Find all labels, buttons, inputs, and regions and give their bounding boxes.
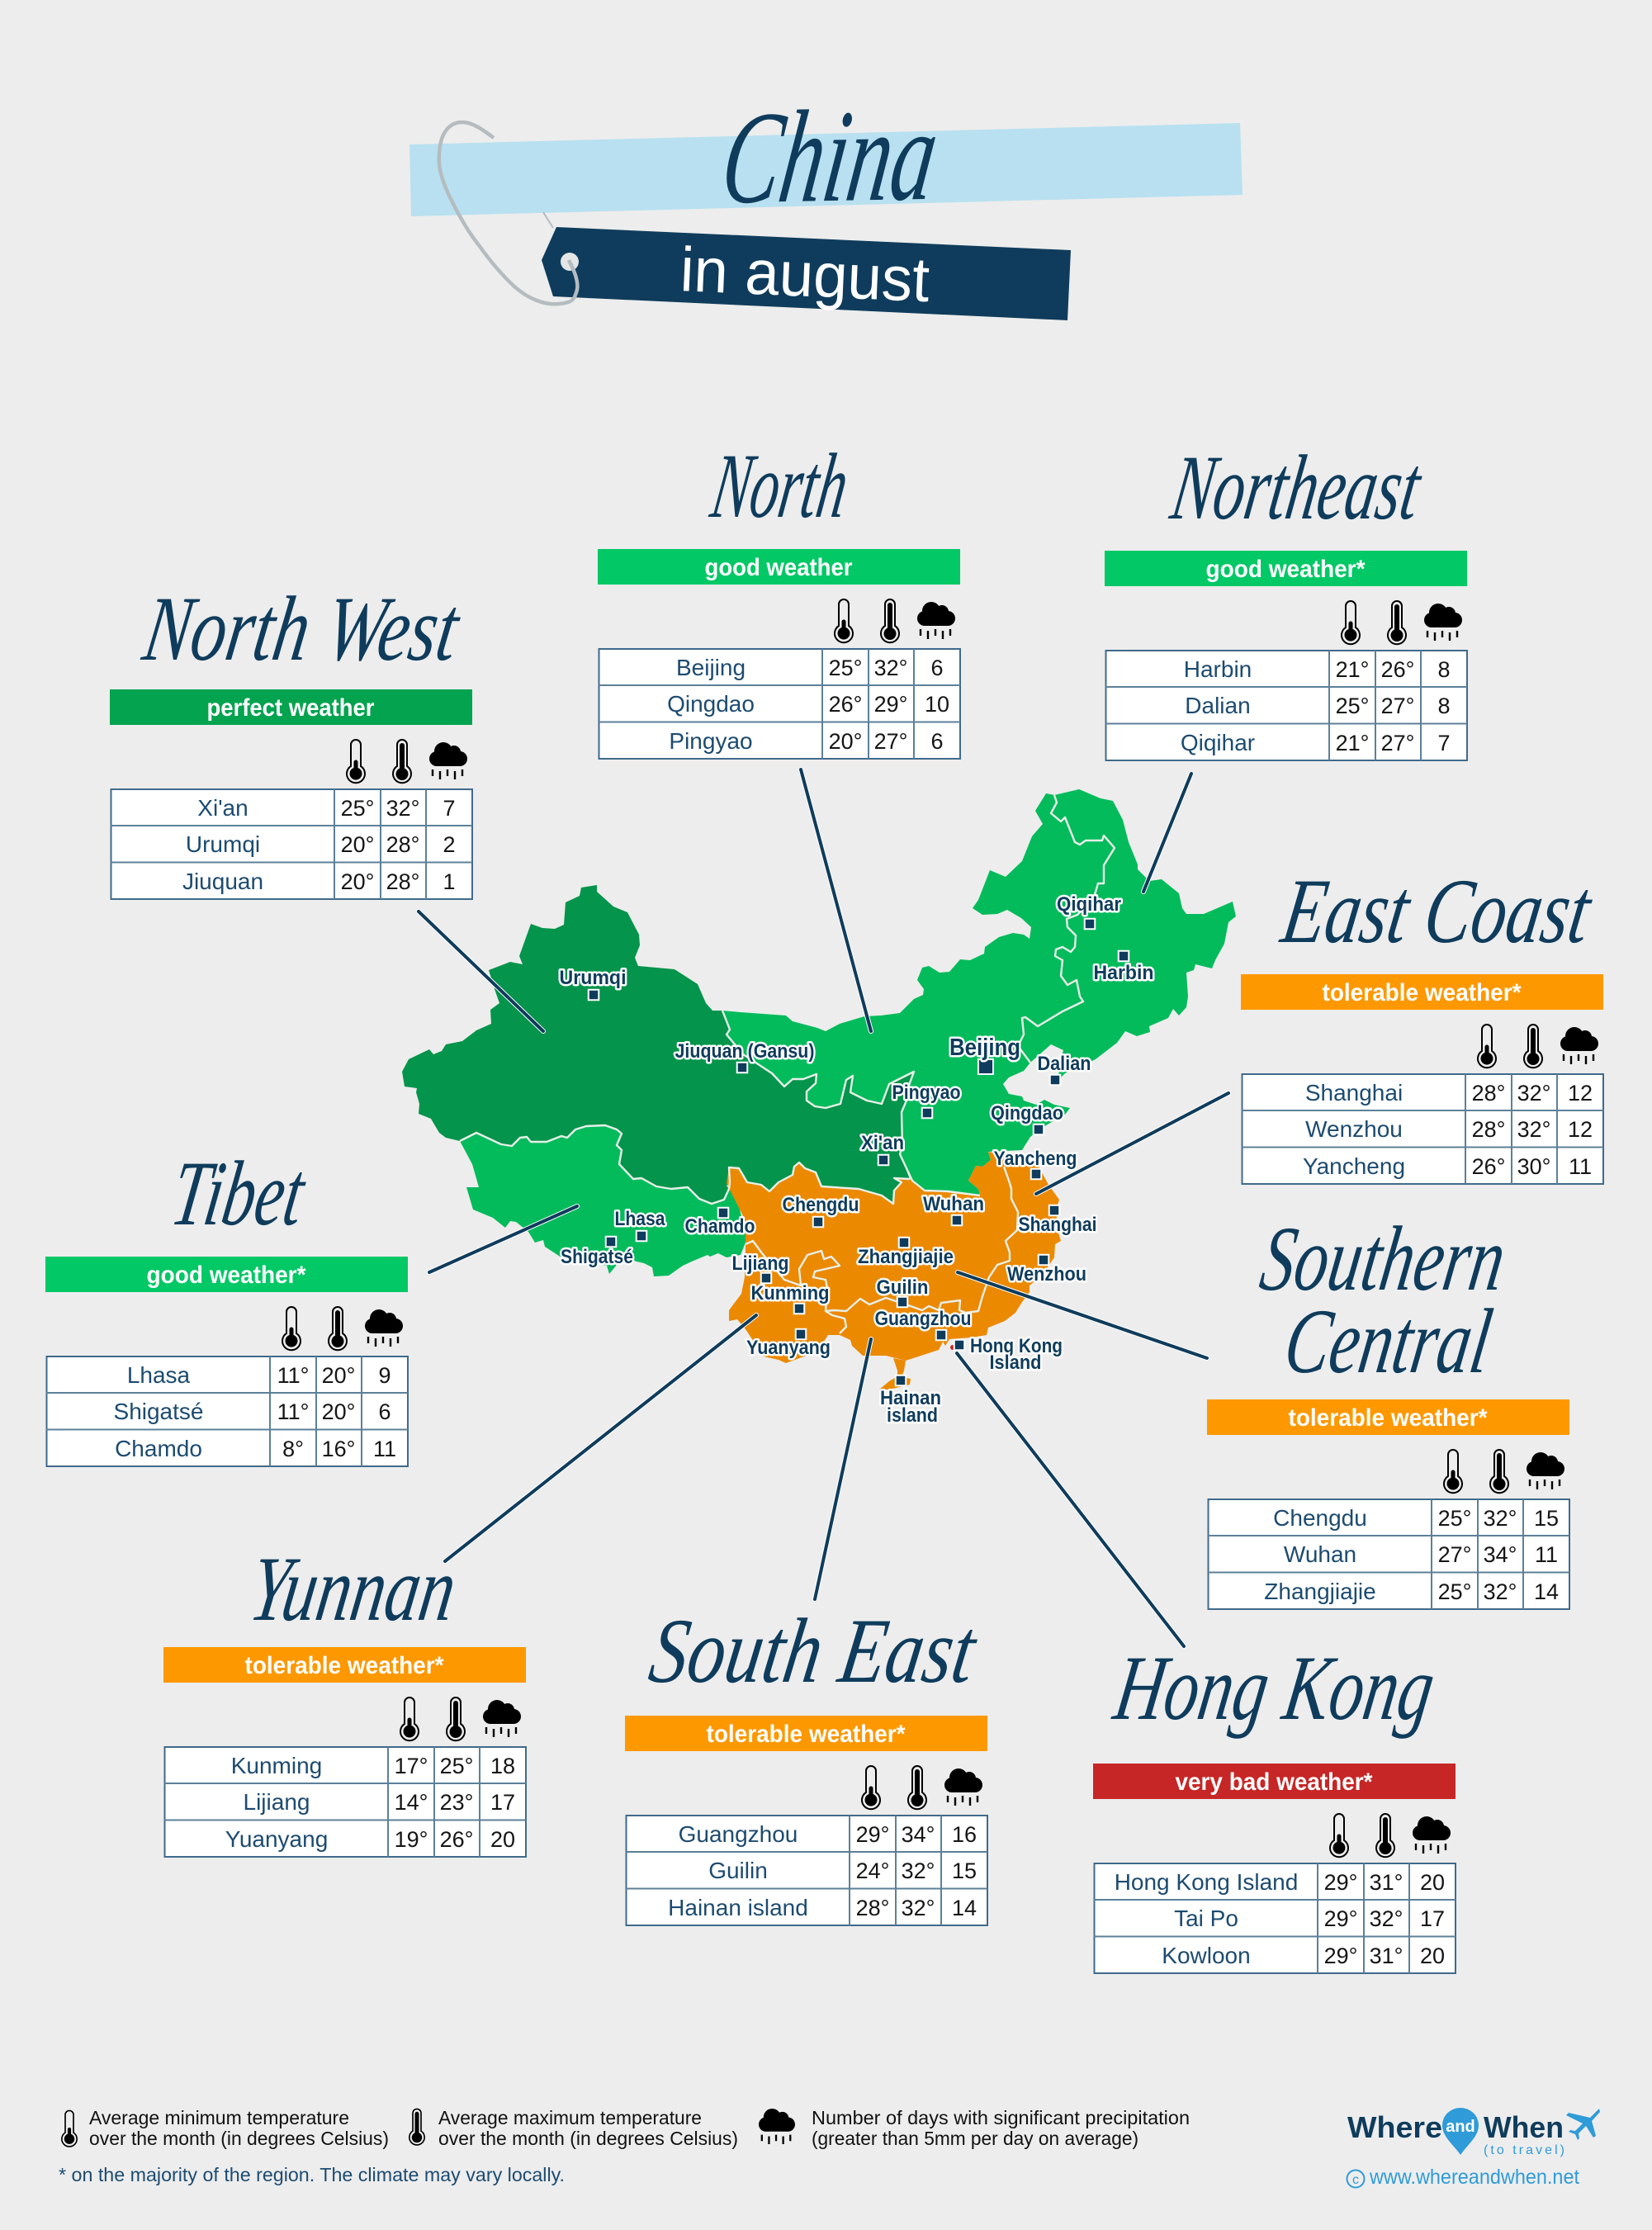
icon: map pin (1442, 2108, 1479, 2155)
climate table: 32° (1484, 1579, 1517, 1604)
region: south (727, 1152, 1061, 1363)
climate table: 12 (1568, 1117, 1593, 1142)
map city labels: Kunming (751, 1282, 829, 1304)
climate table: 8° (282, 1437, 304, 1461)
title ribbon (409, 123, 1243, 216)
climate table: 12 (1568, 1081, 1593, 1106)
climate table: 28° (1472, 1081, 1505, 1106)
column icons (347, 740, 467, 783)
climate table: 6 (930, 729, 944, 754)
legend: minimum temperature: over the month (in degrees Celsius) (89, 2128, 389, 2149)
heading China: China (714, 81, 946, 231)
climate table: 7 (1437, 731, 1451, 755)
climate table: 2 (443, 832, 456, 857)
map city labels: Yuanyang (746, 1337, 831, 1359)
climate table (1242, 1074, 1603, 1184)
column icons (1444, 1450, 1564, 1493)
region: north west (402, 885, 914, 1204)
climate table: Qingdao (667, 691, 755, 717)
panel: northeast (1105, 438, 1467, 760)
climate table: Urumqi (186, 831, 260, 857)
climate table: Hainan island (668, 1895, 808, 1920)
weather banner: good weather (705, 554, 853, 581)
weather banner (110, 689, 472, 725)
weather banner: perfect weather (206, 694, 375, 722)
climate table: 32° (1370, 1906, 1403, 1931)
map city labels: Jiuquan (Gansu) (675, 1040, 814, 1063)
climate table: 32° (386, 796, 419, 821)
copyright url: www.whereandwhen.net (1369, 2166, 1579, 2189)
leader line: tibet (429, 1206, 577, 1272)
panel: yunnan (163, 1539, 526, 1857)
map city labels (560, 893, 1154, 1427)
leader line: northeast (1143, 774, 1191, 892)
climate table: 20° (322, 1363, 355, 1388)
climate table: Wenzhou (1305, 1116, 1403, 1142)
heading: Southern Central: Southern (1254, 1209, 1512, 1310)
map city labels: Island (989, 1352, 1042, 1374)
legend (59, 2107, 1190, 2185)
climate table: Wuhan (1284, 1541, 1356, 1567)
weather banner (598, 549, 960, 585)
panel: east coast (1241, 861, 1603, 1184)
climate table: 25° (440, 1754, 473, 1778)
legend: maximum temperature (409, 2107, 738, 2149)
climate table: 23° (440, 1790, 473, 1815)
map city labels: Lhasa (614, 1208, 665, 1230)
weather banner: very bad weather* (1176, 1768, 1373, 1796)
climate table: Lhasa (127, 1362, 191, 1388)
climate table: 16° (322, 1437, 355, 1461)
climate table: 32° (874, 656, 907, 680)
climate table: 31° (1370, 1944, 1403, 1968)
weather banner (1241, 974, 1603, 1010)
panel: hong kong (1093, 1638, 1456, 1973)
climate table: Tai Po (1174, 1906, 1238, 1931)
climate table: 6 (930, 656, 944, 680)
climate table: 25° (1438, 1506, 1471, 1531)
legend: maximum temperature: Average maximum temperature (438, 2107, 702, 2128)
heading: Southern Central: Central (1278, 1291, 1498, 1393)
climate table: Jiuquan (182, 869, 263, 894)
weather banner (1207, 1399, 1569, 1435)
map city labels: Xi'an (861, 1132, 904, 1154)
climate table: Chengdu (1273, 1505, 1367, 1531)
tag string (543, 212, 553, 228)
logo: Where and When: and (1446, 2118, 1475, 2136)
icon: airplane (1566, 2109, 1600, 2140)
map city labels: Wuhan (923, 1193, 984, 1215)
climate table: 28° (386, 869, 419, 894)
climate table: 7 (443, 796, 456, 821)
climate table (626, 1816, 987, 1925)
climate table: Harbin (1184, 656, 1252, 682)
leader line: east coast (1036, 1093, 1228, 1194)
climate table: 20° (341, 869, 374, 894)
legend: minimum temperature: Average minimum temperature (89, 2107, 349, 2128)
climate table: 34° (1484, 1542, 1517, 1567)
climate table: Xi'an (197, 795, 249, 821)
heading: South East: South East (643, 1601, 984, 1702)
heading: North West: North West (136, 579, 467, 680)
copyright url: c (1352, 2173, 1359, 2187)
climate table (1094, 1863, 1456, 1973)
weather banner (1093, 1764, 1456, 1799)
panel: southern central (1207, 1209, 1569, 1609)
logo: Where and When: When (1484, 2110, 1564, 2144)
climate table: 27° (1381, 694, 1414, 718)
climate table: 20 (1420, 1944, 1445, 1968)
climate table: 29° (874, 692, 907, 717)
heading: Northeast: Northeast (1165, 438, 1429, 539)
climate table: 20 (490, 1827, 515, 1852)
map city labels: Zhangjiajie (858, 1246, 954, 1268)
climate table: 28° (856, 1896, 889, 1920)
climate table: 32° (1484, 1506, 1517, 1531)
column icons (400, 1697, 521, 1740)
climate table: 11 (373, 1437, 396, 1461)
title: China in august (409, 81, 1243, 320)
climate table: 10 (925, 692, 949, 717)
map city labels: Lijiang (731, 1252, 789, 1275)
legend: precipitation days (759, 2107, 1190, 2149)
climate table: 14 (952, 1896, 977, 1920)
climate table: 21° (1336, 731, 1369, 755)
climate table: 26° (440, 1827, 473, 1852)
weather banner: good weather* (147, 1262, 306, 1289)
weather banner (625, 1716, 987, 1751)
climate table: 11° (277, 1399, 309, 1424)
climate table: 29° (1324, 1870, 1357, 1895)
weather banner: tolerable weather* (1288, 1404, 1488, 1432)
map of China (402, 789, 1236, 1390)
climate table: Qiqihar (1181, 730, 1255, 755)
climate table: 32° (902, 1858, 935, 1883)
leader line: north west (419, 911, 543, 1031)
climate table: 20° (829, 729, 862, 754)
weather banner: tolerable weather* (1323, 979, 1522, 1006)
dark tag (542, 227, 1071, 320)
map city labels: Yancheng (994, 1148, 1077, 1170)
legend: minimum temperature (62, 2107, 389, 2149)
heading: North: North (705, 436, 855, 537)
map city labels: Shanghai (1019, 1214, 1096, 1236)
climate table: 31° (1370, 1870, 1403, 1895)
weather banner: tolerable weather* (707, 1721, 906, 1748)
climate table: 26° (1381, 657, 1414, 682)
map city labels: Qingdao (991, 1102, 1063, 1124)
heading: Tibet: Tibet (165, 1143, 313, 1245)
climate table: 15 (1534, 1506, 1559, 1531)
legend: precipitation days: (greater than 5mm per day on average) (812, 2128, 1138, 2149)
climate table (599, 649, 960, 759)
climate table: 29° (1324, 1944, 1357, 1968)
climate table: 25° (829, 656, 862, 680)
climate table: 29° (1324, 1906, 1357, 1931)
climate table (111, 789, 472, 899)
climate table: Zhangjiajie (1264, 1579, 1376, 1604)
climate table: 32° (1517, 1117, 1550, 1142)
climate table: 9 (378, 1363, 391, 1388)
climate table: 11° (277, 1363, 309, 1388)
climate table: 15 (952, 1858, 977, 1883)
legend: precipitation days: Number of days with significant precipitation (812, 2107, 1190, 2128)
climate table: Beijing (676, 655, 746, 680)
climate table: 25° (1336, 694, 1369, 718)
weather banner (163, 1647, 526, 1683)
climate table (1105, 651, 1467, 760)
climate table: Yuanyang (225, 1826, 328, 1852)
climate table: Guangzhou (679, 1821, 798, 1847)
panel: north west (110, 579, 472, 899)
climate table: 11 (1535, 1542, 1558, 1567)
climate table: 21° (1336, 657, 1369, 682)
column icons (282, 1307, 403, 1350)
weather banner: tolerable weather* (244, 1652, 444, 1679)
map city labels: Beijing (949, 1035, 1020, 1061)
weather banner (45, 1257, 408, 1292)
climate table: 14 (1534, 1579, 1559, 1604)
logo: Where and When: Where (1347, 2110, 1442, 2144)
climate table: Dalian (1185, 693, 1251, 718)
map city labels: Shigatsé (561, 1246, 633, 1268)
heading: Southern Central (1254, 1209, 1512, 1393)
panel: north (598, 436, 960, 759)
map city labels: Pingyao (892, 1082, 961, 1104)
climate table: 27° (1438, 1542, 1471, 1567)
climate table: 27° (1381, 731, 1414, 755)
climate table: Shanghai (1305, 1080, 1403, 1106)
climate table: 8 (1437, 694, 1451, 718)
weather banner: good weather* (1205, 556, 1366, 583)
climate table: 25° (1438, 1579, 1471, 1604)
climate table: 20° (322, 1399, 355, 1424)
weather banner (1105, 551, 1467, 586)
map city labels: Chamdo (685, 1215, 755, 1238)
leader line: hong kong (957, 1353, 1184, 1646)
column icons (1342, 601, 1462, 644)
logo: Where and When: (to travel) (1484, 2143, 1564, 2157)
climate table (46, 1356, 408, 1466)
map city labels: Chengdu (783, 1194, 859, 1216)
climate table: 27° (874, 729, 907, 754)
map city labels: Guangzhou (875, 1308, 971, 1330)
subheading in august: in august (679, 234, 931, 315)
column icons (1478, 1025, 1598, 1068)
map city labels: Dalian (1037, 1053, 1091, 1075)
climate table: 17 (1420, 1906, 1445, 1931)
climate table: 19° (395, 1827, 428, 1852)
climate table: 1 (443, 869, 456, 894)
panel: tibet (45, 1143, 408, 1466)
tag ring (439, 122, 577, 304)
climate table: Kunming (231, 1753, 322, 1778)
climate table: Pingyao (669, 728, 753, 754)
leader line: southern central (958, 1272, 1207, 1358)
region: tibet (460, 1125, 746, 1276)
climate table: Shigatsé (114, 1399, 203, 1424)
column icons (1330, 1814, 1451, 1857)
climate table: Chamdo (115, 1436, 202, 1461)
climate table: 17 (490, 1790, 515, 1815)
climate table: Lijiang (244, 1789, 310, 1815)
climate table: 20 (1420, 1870, 1445, 1895)
climate table: 34° (902, 1822, 935, 1847)
region: hainan island (879, 1358, 911, 1390)
climate table: 18 (490, 1754, 515, 1778)
region: north and northeast (722, 789, 1236, 1195)
panel: south east (625, 1601, 987, 1925)
climate table: 24° (856, 1858, 889, 1883)
map city labels: Hong Kong (970, 1335, 1063, 1357)
map city labels: Hainan (880, 1387, 941, 1409)
climate table: 29° (856, 1822, 889, 1847)
climate table: 26° (829, 692, 862, 717)
climate table (164, 1747, 526, 1857)
climate table: 28° (1472, 1117, 1505, 1142)
climate table: Guilin (708, 1858, 768, 1883)
map city labels: Qiqihar (1057, 893, 1121, 916)
climate table: 30° (1517, 1154, 1550, 1179)
hong kong region marker (950, 1345, 955, 1350)
climate table: Hong Kong Island (1115, 1869, 1298, 1895)
leader line: yunnan (445, 1315, 756, 1561)
column icons (835, 599, 955, 642)
climate table: 32° (1517, 1081, 1550, 1106)
map city labels: island (887, 1404, 938, 1427)
climate table: Kowloon (1162, 1943, 1251, 1968)
climate table: 20° (341, 832, 374, 857)
map city labels: Wenzhou (1007, 1263, 1086, 1285)
climate table: 28° (386, 832, 419, 857)
climate table: Yancheng (1303, 1153, 1405, 1179)
heading: Yunnan: Yunnan (244, 1539, 463, 1641)
climate table: 8 (1437, 657, 1451, 682)
climate table: 6 (378, 1399, 391, 1424)
map city labels: Urumqi (560, 967, 626, 989)
map city labels: Guilin (877, 1276, 928, 1299)
footnote: * on the majority of the region. The climate may vary locally. (59, 2164, 565, 2185)
climate table: 32° (902, 1896, 935, 1920)
column icons (862, 1766, 982, 1809)
map city labels: Harbin (1093, 962, 1154, 984)
leader line: south east (815, 1339, 871, 1599)
climate table (1208, 1499, 1569, 1609)
heading: Hong Kong: Hong Kong (1107, 1638, 1441, 1740)
tag hole (561, 253, 579, 271)
climate table: 25° (341, 796, 374, 821)
logo: Where and When (1347, 2108, 1600, 2189)
leader line: north (801, 769, 871, 1031)
map city markers (589, 919, 1129, 1385)
climate table: 16 (952, 1822, 977, 1847)
climate table: 17° (395, 1754, 428, 1778)
climate table: 11 (1569, 1154, 1592, 1179)
climate table: 14° (395, 1790, 428, 1815)
climate table: 26° (1472, 1154, 1505, 1179)
legend: maximum temperature: over the month (in degrees Celsius) (438, 2128, 738, 2149)
